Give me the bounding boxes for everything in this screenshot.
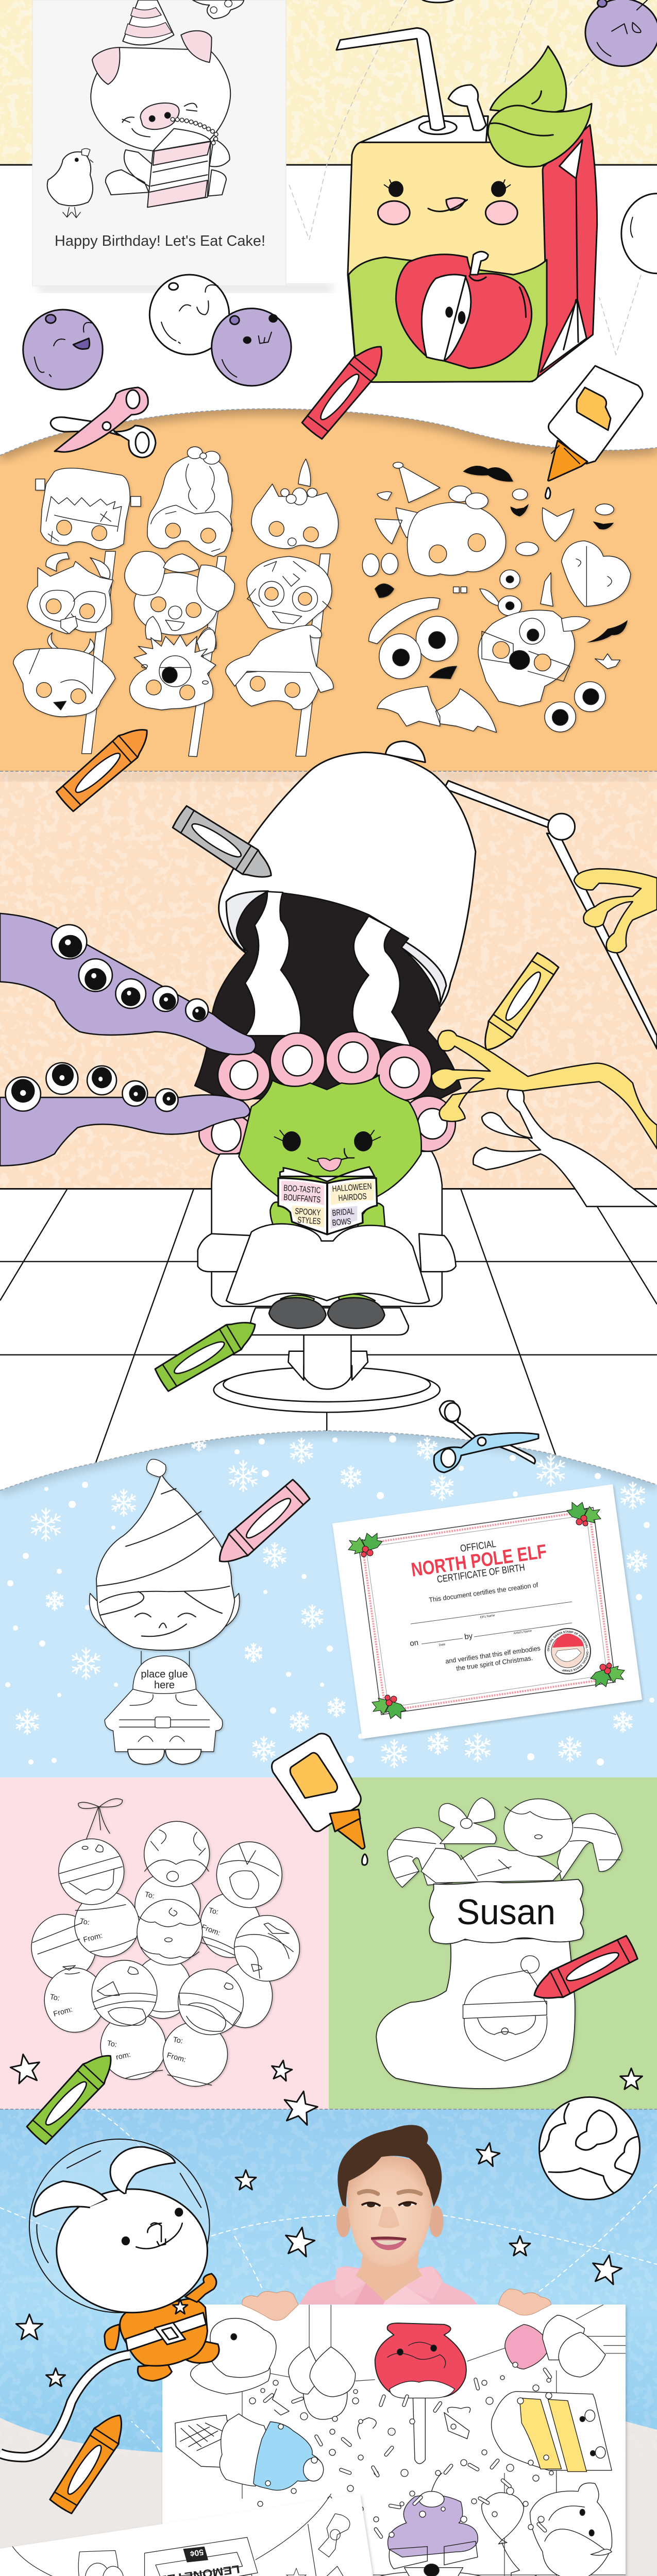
place glue label: here	[154, 1680, 175, 1691]
hair rollers	[199, 1032, 456, 1155]
scissors: blue	[434, 1401, 538, 1472]
gift tag labels: From:	[166, 2051, 187, 2064]
magazine title text: BOO-TASTIC	[283, 1183, 321, 1195]
certificate text: CERTIFICATE OF BIRTH	[436, 1562, 526, 1585]
dashed fold guide lines	[289, 0, 641, 354]
magazine title text: HALLOWEEN	[332, 1182, 372, 1194]
tag: gingerbread ornament	[137, 1900, 203, 1965]
loose mask parts	[362, 462, 631, 733]
mask: puppy with horns	[13, 633, 115, 717]
crayon: green salon	[154, 1312, 262, 1393]
gift tag labels	[49, 1890, 222, 2064]
background: green panel	[329, 1777, 657, 2109]
crayon: pink elf	[210, 1478, 311, 1572]
cake slice	[492, 2392, 612, 2470]
glue bottle: upper	[545, 366, 643, 499]
background: orange hill	[0, 402, 657, 780]
salon chair, cape and shoes	[198, 1224, 456, 1412]
apple juice box character	[336, 28, 597, 382]
stocking cuff	[429, 1879, 583, 1944]
magazine title text: BOUFFANTS	[283, 1193, 321, 1205]
scene: planet	[539, 2097, 640, 2199]
crayon: orange space	[48, 2408, 132, 2515]
candy canes and toys	[388, 1798, 622, 1887]
stocking body	[376, 1938, 575, 2089]
poster wall lines	[242, 2304, 626, 2499]
gift tag labels: To:	[106, 2039, 117, 2049]
tag: beanie ornament	[178, 1969, 243, 2035]
scissors: pink	[50, 387, 156, 457]
bunny suit	[105, 2274, 219, 2381]
panel: Christmas gift tags	[31, 1799, 299, 2087]
mask: witch	[226, 625, 333, 709]
wrapped candies	[318, 2514, 385, 2576]
tag: snowman cap drawn over snow tag line	[63, 1965, 79, 1974]
tag: reindeer ornament	[144, 1821, 210, 1887]
mask: unicorn skull	[251, 459, 339, 549]
mask: Frankenstein	[36, 468, 141, 550]
certificate text: This document certifies the creation of	[428, 1581, 539, 1604]
squid monster	[78, 2551, 119, 2576]
glue bottle: lower	[272, 1734, 367, 1865]
yellow and white claw hands	[431, 869, 657, 1207]
tag: Santa ornament	[59, 1839, 124, 1905]
stocking name: Susan	[457, 1892, 555, 1932]
certificate text: Artist's Name	[513, 1630, 532, 1635]
Santa face on stocking	[463, 1956, 547, 2061]
tag: penguin ornament	[234, 1916, 299, 1981]
crayon: yellow salon	[475, 951, 560, 1058]
magazine with titles	[270, 1202, 385, 1232]
stars	[9, 2052, 642, 2386]
gift tag labels: To:	[208, 1906, 219, 1917]
boy holding the poster	[299, 2125, 478, 2304]
Santa stamp seal: OFFICIAL SANTA STAMP OF APPROVAL • OFFICIAL SANTA STAMP	[547, 1631, 588, 1672]
poster: space lemonade monsters	[0, 2494, 407, 2576]
berry: purple centre	[212, 309, 291, 386]
magazine title text: BOWS	[332, 1217, 351, 1228]
mask: bride of Frankenstein	[147, 447, 232, 556]
pig with cake illustration	[47, 0, 244, 218]
elf hat and head	[96, 1474, 234, 1650]
berry: purple top right	[585, 0, 657, 66]
panel: personalised stocking	[376, 1798, 622, 2089]
magazine title text: HAIRDOS	[338, 1192, 367, 1203]
panel: Halloween masks on sticks	[13, 447, 631, 757]
bride: chair back, green face and lips	[212, 1075, 442, 1307]
crayon: red top	[300, 337, 392, 440]
crayon: grey	[171, 804, 279, 888]
price tag text: 50¢	[189, 2547, 204, 2558]
gift tag labels: From:	[200, 1923, 222, 1938]
crayon: green tags	[25, 2046, 121, 2146]
ice cream cone	[175, 2415, 234, 2468]
certificate text: Date	[439, 1643, 446, 1647]
gift tag labels: From:	[82, 1931, 104, 1944]
certificate text	[409, 1538, 548, 1672]
certificate text: Elf's Name	[480, 1614, 495, 1619]
ornament bow string	[78, 1799, 123, 1846]
holly corners	[348, 1502, 625, 1719]
mask: sugar skull	[247, 556, 332, 630]
certificate text: NORTH POLE ELF	[410, 1540, 548, 1581]
poster confetti rings and sprinkles	[249, 2362, 553, 2540]
elf lower legs and boots	[128, 1750, 201, 1765]
background: cream wall	[0, 0, 657, 422]
North Pole elf certificate	[332, 1464, 644, 1741]
card caption: Happy Birthday! Let's Eat Cake!	[55, 233, 265, 249]
certificate text: and verifies that this elf embodies	[445, 1644, 541, 1665]
mask: clown	[125, 551, 234, 649]
place glue label: place glue	[141, 1669, 188, 1680]
bride hair	[195, 892, 461, 1099]
oxygen tube	[0, 2354, 130, 2457]
certificate text: by	[464, 1632, 474, 1641]
magazine title text: STYLES	[297, 1215, 321, 1226]
salon scene: dryer hood and arm	[219, 741, 657, 1049]
poster: carnival treats	[162, 2304, 626, 2576]
mask: owl monster	[27, 553, 113, 634]
gift tag labels: rom:	[115, 2050, 131, 2062]
astronaut bunny	[0, 2139, 219, 2457]
face fragment top	[421, 0, 454, 3]
magazine title text: BRIDAL	[332, 1207, 355, 1218]
certificate text: on	[409, 1638, 419, 1648]
crayon: red stocking	[528, 1934, 639, 2008]
space stars on poster	[11, 2568, 340, 2576]
background: beige tabletop	[0, 2109, 657, 2576]
birthday card	[32, 0, 332, 292]
certificate rules	[411, 1602, 572, 1644]
magazine title text: SPOOKY	[295, 1207, 321, 1217]
book open	[278, 1167, 377, 1234]
gift tag labels: To:	[172, 2036, 183, 2045]
tag: elf ornament	[92, 1960, 157, 2026]
mask: cyclops monster	[130, 629, 216, 710]
tag: girl ornament	[216, 1842, 282, 1908]
poster lower treats	[375, 2473, 612, 2576]
berry: purple left	[23, 310, 103, 389]
berry: white centre	[149, 275, 229, 354]
magazine title text	[283, 1182, 372, 1228]
elf ears	[90, 1594, 240, 1630]
purple tentacles with eyes	[0, 913, 256, 1166]
poster clouds and balloons	[175, 2315, 612, 2490]
elf paper doll	[90, 1459, 240, 1752]
bunny helmet and head	[29, 2139, 210, 2313]
gift tag labels: To:	[144, 1890, 155, 1901]
certificate text: the true spirit of Christmas.	[456, 1654, 533, 1672]
background: space sky	[0, 2109, 657, 2458]
poster wall and sign	[12, 2494, 352, 2576]
mask sticks	[82, 551, 330, 757]
blueberry characters	[23, 0, 657, 389]
background: snowy blue hill	[0, 1427, 657, 1777]
background: pink panel	[0, 1777, 329, 2109]
gift tag labels: To:	[49, 1993, 60, 2003]
gift tag labels: From:	[53, 2006, 74, 2019]
berry: white right edge	[621, 194, 657, 274]
background: peach wall and tiled salon floor	[0, 771, 657, 1467]
certificate border	[358, 1507, 615, 1715]
red candy apple	[413, 2389, 425, 2464]
gift tag labels: To:	[79, 1917, 90, 1927]
boy hands over poster	[242, 2289, 551, 2320]
certificate text: OFFICIAL	[460, 1538, 497, 1554]
crayon: orange hill	[55, 719, 156, 813]
lemonade stand	[145, 2537, 258, 2576]
